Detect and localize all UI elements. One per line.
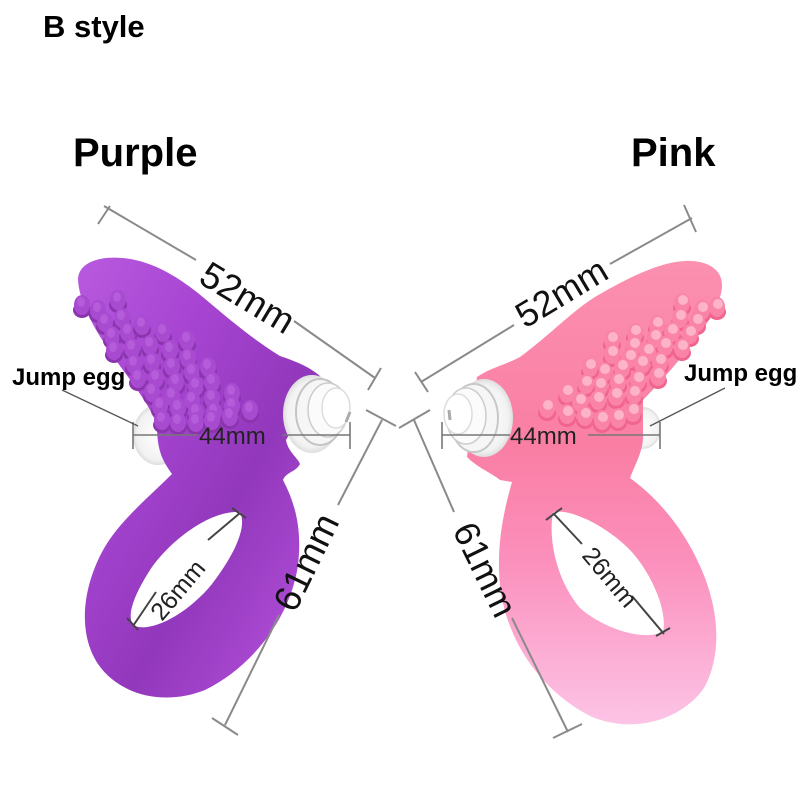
dimension: pink 26mm (546, 508, 670, 636)
product: purple (73, 258, 350, 698)
product: pink (444, 261, 726, 724)
heading: purple: Purple (73, 131, 197, 175)
heading: pink: Pink (631, 131, 716, 175)
icon: pink white cap (444, 379, 513, 457)
dimension: purple 61mm (212, 410, 396, 735)
dimension: purple 44mm: 44mm (199, 423, 266, 450)
label: purple jump egg (12, 364, 138, 426)
label: pink jump egg (650, 360, 797, 426)
dimension: purple 26mm (127, 508, 246, 630)
dimension: pink 44mm (442, 422, 660, 450)
label: purple jump egg: Jump egg (12, 364, 125, 391)
icon: purple ring and body (78, 258, 322, 698)
icon: purple egg at back (133, 405, 183, 465)
icon: purple nubs (73, 290, 259, 435)
dimension: purple 61mm: 61mm (265, 507, 347, 618)
label: pink jump egg: Jump egg (684, 360, 797, 387)
icon: purple white cap (283, 375, 350, 453)
title: B style (43, 9, 145, 44)
dimension: purple 44mm (133, 422, 350, 450)
dimension: pink 52mm: 52mm (508, 249, 615, 336)
dimension: pink 44mm: 44mm (510, 423, 577, 450)
dimension: pink 26mm: 26mm (576, 542, 643, 613)
dimension: purple 52mm: 52mm (193, 254, 302, 342)
dimension: purple 26mm: 26mm (145, 555, 211, 626)
icon: pink egg at back (625, 407, 661, 449)
dimension: purple 52mm (98, 206, 381, 390)
dimension: pink 61mm (399, 410, 582, 738)
icon: pink nubs (538, 293, 726, 433)
dimension: pink 61mm: 61mm (445, 516, 526, 623)
dimension: pink 52mm (415, 205, 696, 392)
icon: pink ring and body (467, 261, 722, 724)
